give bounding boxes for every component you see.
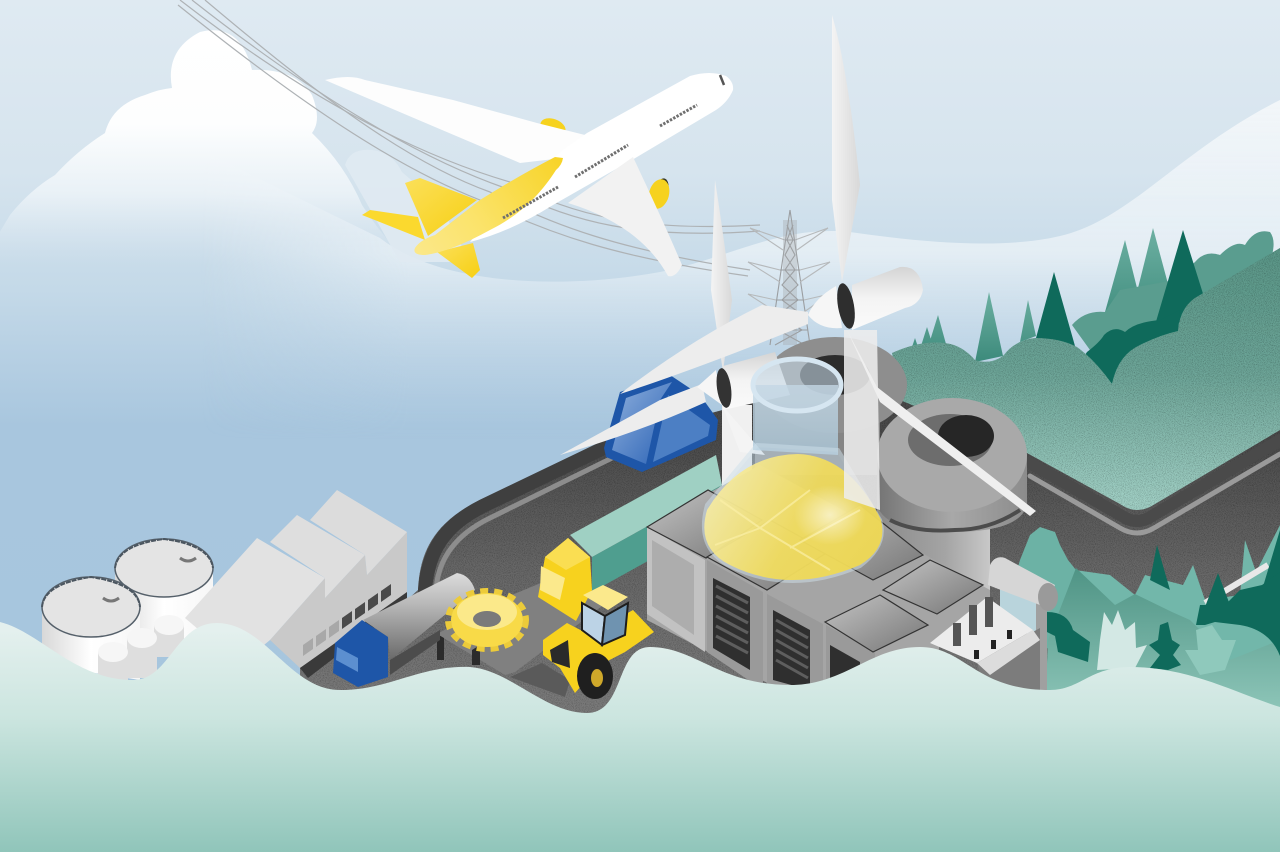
- tractor roof: [583, 585, 628, 610]
- cab roof: [545, 538, 590, 570]
- cockpit: [720, 75, 724, 85]
- front tank: [42, 607, 140, 680]
- front face one with door: [647, 527, 705, 652]
- flask: [704, 359, 882, 581]
- far wing: [325, 77, 585, 163]
- hub cone: [808, 286, 842, 328]
- nacelle: [852, 267, 923, 330]
- small tanks: [154, 625, 184, 657]
- factory windows: [303, 620, 339, 656]
- van windscreen: [612, 382, 672, 464]
- roof tile E: [800, 505, 923, 580]
- mid teal mountains: [1045, 568, 1280, 710]
- white road stripe: [1205, 565, 1268, 603]
- ring outer wall: [877, 455, 1027, 532]
- hub ring: [834, 282, 858, 330]
- road edge stripes: [425, 440, 1280, 590]
- factory base: [300, 592, 407, 678]
- roof tile B: [707, 520, 828, 590]
- pale palm leaf: [1097, 610, 1147, 670]
- pale teal ridge: [1045, 525, 1280, 710]
- tower: [722, 405, 752, 490]
- neck rim: [753, 359, 841, 411]
- hub: [697, 370, 722, 405]
- lower body: [877, 500, 990, 645]
- platform and conveyor: [437, 575, 610, 675]
- upper engine: [538, 115, 568, 139]
- upper blade: [832, 15, 860, 282]
- back bushes: [1072, 231, 1274, 350]
- ring hole: [938, 415, 994, 457]
- tank railings: [42, 539, 213, 607]
- platform: [930, 597, 1033, 663]
- yellow tractor: [510, 585, 654, 699]
- gear hole: [473, 611, 501, 627]
- radiator: [977, 628, 1040, 692]
- factory: [185, 490, 407, 678]
- glass housing: [1000, 575, 1040, 640]
- front face three with louvres: [767, 594, 823, 700]
- yellow truck cab: [538, 538, 592, 621]
- tractor body: [543, 610, 654, 693]
- trailer chassis: [390, 630, 440, 675]
- near wing: [568, 157, 682, 276]
- cylinder: [988, 557, 1055, 607]
- upper blade: [711, 180, 732, 372]
- storage silo behind the flask: [755, 337, 907, 475]
- liquid panel lines: [715, 490, 860, 570]
- lower tail fin: [437, 243, 480, 278]
- roof tile C: [825, 595, 928, 652]
- coil cylinder: [877, 398, 1027, 645]
- tractor grille: [550, 640, 570, 668]
- tank: [363, 573, 475, 660]
- front stripe: [977, 630, 1040, 675]
- teal truck box: [570, 455, 722, 592]
- foreground wavy hills: [0, 622, 1280, 852]
- power lines: [178, 0, 760, 276]
- horizontal stabilizer: [362, 210, 425, 240]
- cab windscreen: [336, 647, 358, 672]
- dark palm leaf: [1149, 622, 1181, 670]
- pale teal rock: [1015, 527, 1085, 650]
- pale wave band across the sky: [271, 100, 1280, 338]
- flask bulb: [704, 445, 882, 581]
- yellow tail section: [414, 157, 563, 255]
- tractor cab windows: [582, 603, 605, 645]
- green hill platform: [892, 248, 1280, 510]
- front face four with louvres: [826, 625, 875, 700]
- gear body: [451, 593, 523, 647]
- big wind turbine: [620, 15, 1036, 516]
- small wind turbine: [560, 180, 790, 490]
- asphalt road surface: [300, 390, 1280, 720]
- left blade: [560, 384, 706, 455]
- lower right forest: [1015, 525, 1280, 710]
- electricity pylon: [748, 210, 830, 345]
- gear teeth: [448, 591, 526, 649]
- lower engine: [645, 177, 673, 211]
- second roof: [270, 515, 365, 598]
- liquid highlight: [794, 485, 866, 545]
- tower: [844, 330, 880, 510]
- transformer unit: [930, 557, 1058, 692]
- dark bush left: [1047, 612, 1090, 662]
- bulldozer blade: [510, 663, 570, 697]
- support leg: [1036, 600, 1047, 692]
- cab windscreen: [540, 566, 565, 600]
- industrial block: [647, 465, 990, 700]
- ring: [714, 367, 734, 409]
- ring top: [877, 398, 1027, 512]
- dark conifers: [1150, 530, 1280, 620]
- yellow liquid: [704, 454, 882, 580]
- lower blade: [722, 405, 765, 455]
- roof tile A: [647, 490, 762, 558]
- roof tile D: [883, 560, 983, 614]
- airplane: [325, 73, 733, 278]
- back tank: [115, 568, 213, 640]
- dark conifers: [1036, 230, 1205, 346]
- forest on the upper right: [911, 228, 1274, 384]
- block mass: [647, 465, 990, 700]
- dark foliage right: [1196, 572, 1280, 656]
- fuselage: [470, 73, 733, 242]
- vertical fin: [405, 178, 477, 236]
- ring centre: [908, 414, 992, 466]
- small conifers: [911, 292, 1036, 362]
- third roof: [310, 490, 407, 575]
- blue van: [604, 375, 718, 472]
- teal conifers: [1100, 228, 1175, 330]
- shadow band: [890, 510, 1020, 531]
- van side window: [653, 395, 710, 462]
- tanker truck: [333, 573, 475, 687]
- oil storage tanks: [42, 539, 213, 682]
- factory walls: [270, 532, 407, 668]
- front face two with louvres: [707, 560, 763, 690]
- yellow gear: [448, 591, 526, 649]
- first roof: [185, 538, 325, 665]
- lower right blade: [847, 330, 1036, 516]
- small background cloud: [345, 150, 470, 262]
- insulators: [953, 597, 993, 646]
- flask neck: [753, 385, 838, 455]
- cab: [333, 620, 388, 687]
- large cloud: [0, 30, 410, 265]
- dark bush: [1085, 310, 1180, 384]
- nacelle: [723, 352, 790, 410]
- left blade: [620, 305, 808, 394]
- teal palm leaf: [1185, 625, 1236, 675]
- tractor wheel: [577, 653, 613, 699]
- plane windows: [503, 105, 697, 218]
